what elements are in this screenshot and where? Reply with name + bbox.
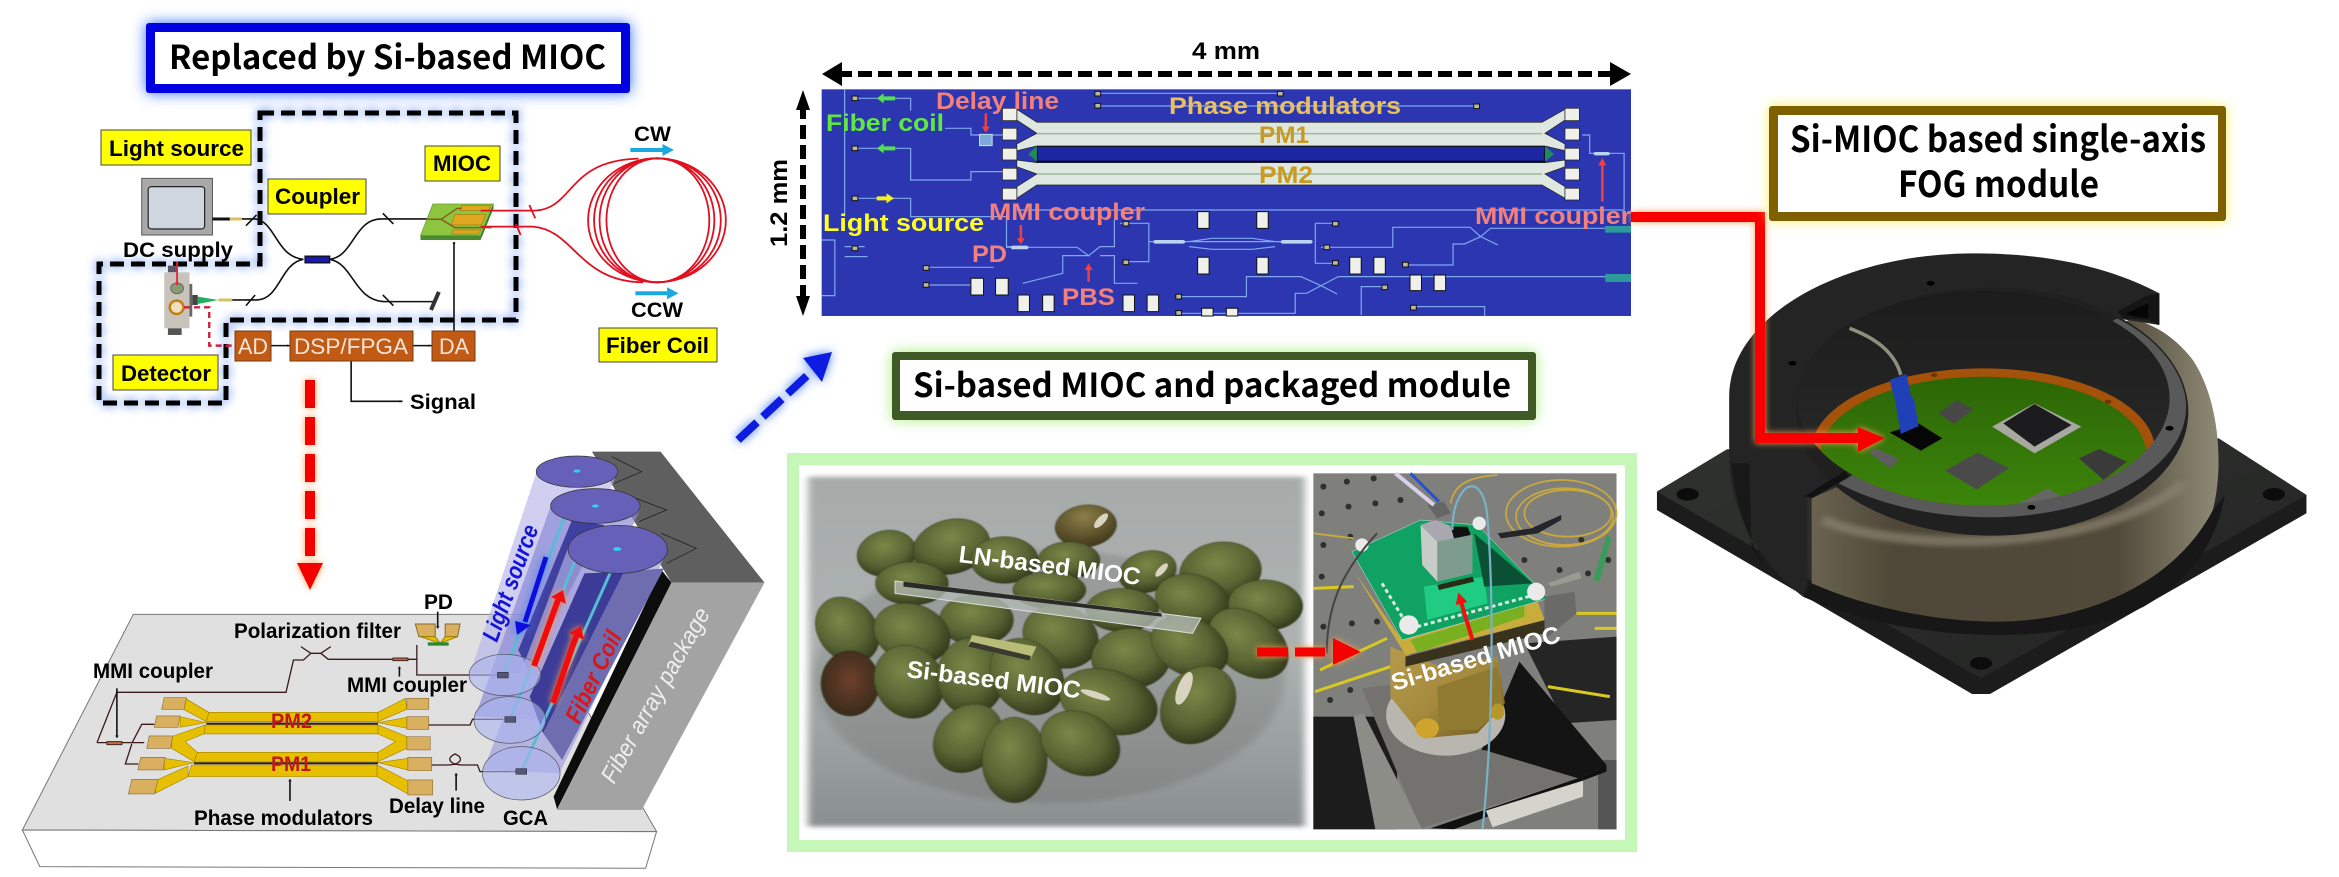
- circuit board with chips: [1814, 368, 2154, 506]
- label: GCA: GCA: [503, 807, 548, 830]
- square IC: [1945, 452, 2009, 489]
- heading: Si-MIOC based single-axis FOG module: FOG module: [1898, 156, 2099, 208]
- label: Coupler: [268, 179, 366, 214]
- label: PM1: PM1: [271, 753, 311, 776]
- panel: fabricated Si-MIOC micrograph: [766, 38, 1631, 316]
- dark lower regions: [1313, 637, 1617, 829]
- mounting holes: [1677, 488, 2285, 670]
- arrow: fiber coil direction 2 (red): [553, 626, 584, 703]
- rim bolts: [1788, 281, 2174, 510]
- MMI and coupler elements: [1011, 152, 1610, 249]
- dimension: 4 mm: [822, 38, 1631, 86]
- dimension: 4 mm: 4 mm: [1192, 38, 1260, 65]
- label: Fiber Coil: [599, 328, 717, 362]
- label: LN-based MIOC: LN-based MIOC: [957, 541, 1142, 591]
- label: CCW: CCW: [631, 299, 683, 322]
- block: DA: [432, 331, 475, 361]
- label: Fiber array package (rotated): Fiber array package: [596, 603, 716, 788]
- stage block: [1354, 662, 1606, 829]
- beans: [807, 501, 1309, 803]
- icon: detector: [164, 262, 244, 346]
- phase modulator strips: [1017, 109, 1565, 198]
- label: Si-based MIOC on beans: Si-based MIOC: [905, 656, 1082, 704]
- bottom IC: [2019, 488, 2060, 504]
- contact pads: [128, 698, 433, 795]
- green fiber boot: [1593, 535, 1612, 582]
- graded coupler array cylinders: [469, 456, 668, 800]
- outer rim: [1796, 288, 2188, 536]
- CW arrow: [630, 144, 674, 156]
- green circuit board: [1352, 520, 1549, 640]
- annotation arrows: [117, 612, 456, 801]
- label: Si-based MIOC on stage: Si-based MIOC: [1388, 621, 1563, 697]
- arrow: schematic to fabricated chip (blue dashed): [738, 352, 832, 440]
- label: PBS: PBS: [1062, 284, 1115, 311]
- label: PD: PD: [972, 241, 1007, 268]
- carrier bolts: [1931, 373, 2111, 404]
- MMI coupler elements: [107, 658, 408, 745]
- dashed replacement boundary: [99, 113, 516, 403]
- block: DA: DA: [439, 334, 469, 359]
- dark shell: top surface and left block: [1729, 253, 2159, 597]
- icon: MIOC chip: [420, 204, 493, 240]
- label: MMI coupler right: MMI coupler: [1475, 203, 1631, 230]
- module 3D drawing: [1657, 253, 2306, 694]
- dimension: 1.2 mm: 1.2 mm: [766, 159, 793, 247]
- signal chain connectors: [271, 242, 454, 401]
- label: Fiber Coil: Fiber Coil: [606, 333, 709, 358]
- foam upper highlight: [1823, 483, 2184, 541]
- label: Delay line: Delay line: [389, 795, 485, 818]
- gold electrodes of phase modulators: [155, 698, 408, 794]
- lower dark band: [1803, 495, 2225, 635]
- arrow: schematic to 3D chip drawing (red dashed): [297, 380, 323, 590]
- fiber array block and connector: [1421, 502, 1474, 590]
- direction arrow: fiber coil 1: [877, 93, 895, 103]
- icon: light source: [142, 178, 242, 235]
- substrate slab: [22, 614, 657, 868]
- 3D chip drawing: [22, 452, 765, 868]
- gold mount column: [1390, 620, 1544, 738]
- green PCB: [1820, 376, 2146, 506]
- bean shadows: [814, 550, 1285, 803]
- gold plate beneath board: [1355, 573, 1544, 655]
- label: DC supply: DC supply: [123, 239, 233, 262]
- direction arrow: fiber coil 2: [877, 143, 895, 153]
- wires, tool and bracket: [1395, 473, 1581, 640]
- chip photo: [822, 89, 1631, 316]
- label: Fiber Coil (rotated): Fiber Coil: [560, 626, 628, 728]
- panel: single-axis FOG module render: [1631, 106, 2306, 694]
- label: PM2: PM2: [271, 710, 312, 733]
- notches: [1805, 293, 2159, 498]
- label: MMI coupler left: MMI coupler: [989, 199, 1145, 226]
- small IC: [1939, 400, 1973, 424]
- panel frame: [793, 459, 1631, 846]
- label: Signal: Signal: [410, 391, 476, 414]
- side IC: [2079, 449, 2127, 480]
- label: Light source: Light source: [109, 136, 244, 161]
- label: Delay line: Delay line: [936, 88, 1059, 115]
- photo: chip mounted on stage: [1313, 473, 1617, 829]
- gold and yellow fibers: [1313, 475, 1617, 697]
- photodiode: [415, 624, 460, 646]
- photo: chips on mung beans: [807, 477, 1309, 827]
- arrow: fiber coil direction 1 (red): [534, 590, 566, 666]
- block: DSP/FPGA: DSP/FPGA: [294, 334, 408, 359]
- label: CW: CW: [634, 123, 671, 146]
- block: AD: AD: [238, 334, 268, 359]
- bean hila: [1078, 512, 1196, 705]
- Si-MIOC package: [1890, 423, 1942, 451]
- small bond pads: [852, 91, 1479, 315]
- modulator pads: [1002, 108, 1579, 200]
- direction arrow: light source: [877, 193, 894, 203]
- label: PD: PD: [424, 591, 453, 614]
- panel: photos of packaged module: [793, 459, 1631, 846]
- schematic drawing: fibers, coupler, source, detector, chip and coil: [142, 144, 726, 401]
- SOIC chip: [1868, 448, 1899, 468]
- label: Light source: Light source: [823, 210, 984, 237]
- label: Detector: [113, 355, 218, 390]
- panel: FOG schematic replaced by Si-based MIOC: [99, 23, 726, 414]
- label: Fiber coil: Fiber coil: [826, 110, 944, 137]
- heading: Replaced by Si-based MIOC: [146, 23, 630, 93]
- waveguides: [97, 645, 517, 772]
- grating coupler pad pairs: [971, 212, 1446, 316]
- fiber array package: [554, 452, 765, 810]
- optical fibers: [1327, 486, 1492, 829]
- label: MIOC: MIOC: [433, 151, 491, 176]
- chip waveguide routing: [822, 89, 1631, 316]
- panel: 3D Si-MIOC chip with fiber array: [22, 452, 765, 868]
- label: MMI coupler left: MMI coupler: [93, 660, 213, 683]
- label: Light source: [101, 130, 251, 165]
- red pointer arrows: [982, 113, 1606, 282]
- label: Light source (rotated): Light source: [477, 521, 544, 645]
- shaded left side: [1731, 463, 1774, 577]
- dimension: 1.2 mm: [766, 90, 810, 316]
- heading: Si-based MIOC and packaged module: Si-based MIOC and packaged module: [913, 359, 1511, 407]
- red connector from chip to module: [1631, 217, 1885, 452]
- processor: [1992, 403, 2081, 453]
- fiber facets: [1605, 226, 1631, 282]
- arrow: light source direction (blue): [515, 557, 546, 635]
- label: Polarization filter: Polarization filter: [234, 620, 401, 643]
- CCW arrow: [635, 287, 679, 299]
- orange carrier ring: [1814, 368, 2154, 506]
- label: Coupler: Coupler: [275, 184, 360, 209]
- arrow: photo to photo (red dashed): [1257, 638, 1361, 665]
- board screws: [1355, 517, 1545, 635]
- grey inner ring: [1838, 318, 2186, 517]
- heading: Si-MIOC based single-axis FOG module: [1769, 106, 2226, 221]
- inner well: [1797, 291, 2170, 506]
- heading: Replaced by Si-based MIOC: Replaced by Si-based MIOC: [169, 31, 606, 79]
- table holes: [1319, 475, 1611, 703]
- label: Phase modulators: Phase modulators: [1169, 93, 1401, 120]
- label: PM2: PM2: [1259, 162, 1313, 189]
- icon: fiber coil with CW and CCW arrows: [481, 158, 726, 282]
- heading: Si-based MIOC and packaged module: [892, 352, 1536, 420]
- Si-based MIOC chip: [968, 635, 1036, 661]
- label: MMI coupler right: MMI coupler: [347, 674, 467, 697]
- fiber coupler: [242, 213, 439, 310]
- silver disc: [1386, 674, 1505, 756]
- label: PM1: PM1: [1259, 122, 1309, 149]
- LN-based MIOC glass chip: [895, 581, 1201, 633]
- red pointer arrow: [1456, 593, 1472, 640]
- label: Detector: Detector: [121, 361, 211, 386]
- label: Phase modulators: Phase modulators: [194, 807, 373, 830]
- heading: Si-MIOC based single-axis FOG module: Si-MIOC based single-axis: [1790, 111, 2206, 163]
- delay line spiral: [980, 134, 992, 146]
- fiber and blue holder: [1850, 328, 1919, 434]
- optical table: [1313, 473, 1617, 829]
- label: MIOC: [425, 146, 500, 181]
- foam wrapped side: [1812, 318, 2219, 622]
- base plate: [1657, 438, 2306, 694]
